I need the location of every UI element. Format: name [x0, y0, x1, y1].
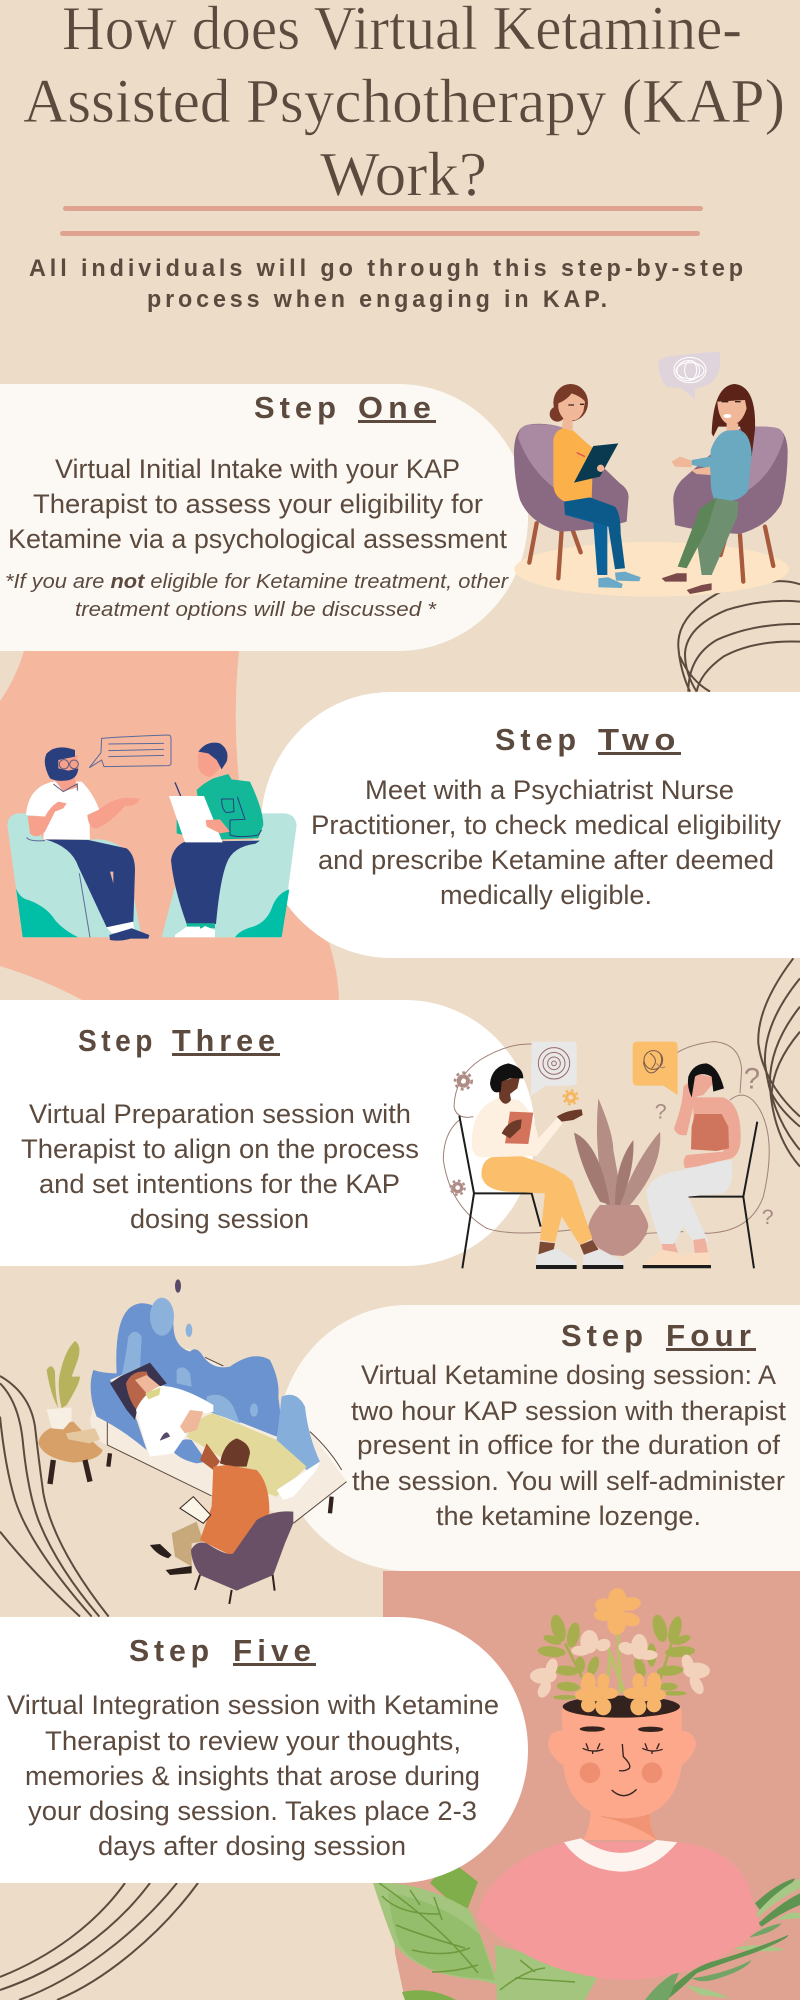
illustration: step one therapist and client	[514, 352, 789, 597]
question marks: ?	[655, 1100, 667, 1124]
heading: step one: Step	[254, 390, 341, 425]
text: step one body: Ketamine via a psychological assessment	[8, 524, 508, 554]
heading: step four: Four	[666, 1318, 756, 1353]
text: step four body	[351, 1360, 787, 1531]
text: step three body: dosing session	[130, 1204, 309, 1234]
title: Assisted Psychotherapy (KAP)	[23, 68, 785, 136]
subtitle: All individuals will go through this step-by-step	[29, 255, 747, 282]
heading: step two: Two	[598, 722, 681, 757]
text: step four body: two hour KAP session with therapist	[351, 1396, 787, 1426]
title	[23, 0, 785, 209]
panel: step one	[0, 384, 528, 651]
heading: step five: Five	[233, 1633, 316, 1668]
heading: step one	[254, 390, 436, 425]
heading: step five: Step	[129, 1633, 214, 1668]
text: step five body: memories & insights that arose during	[25, 1761, 480, 1791]
illustration: big leaves behind step five	[373, 1860, 600, 2000]
text: step two body: and prescribe Ketamine after deemed	[318, 845, 774, 875]
flowers and leaves	[530, 1588, 710, 1715]
text: step four body: the ketamine lozenge.	[436, 1501, 701, 1531]
gears	[451, 1073, 578, 1195]
heading: step four	[561, 1318, 756, 1353]
text: step three body: and set intentions for the KAP	[39, 1169, 400, 1199]
heading: step one: One	[358, 390, 436, 425]
text: step five body: days after dosing session	[98, 1831, 406, 1861]
heading: step three: Step	[78, 1023, 157, 1058]
heading: step four: Step	[561, 1318, 648, 1353]
text: step two body: medically eligible.	[440, 880, 652, 910]
panel: step four	[278, 1305, 800, 1571]
text: step four body: the session. You will self-administer	[352, 1466, 785, 1496]
decorative curves near step three	[758, 958, 800, 1167]
question marks: ?	[762, 1205, 774, 1229]
text: eligibility note	[5, 570, 509, 621]
text: eligibility note: *If you are not eligible for Ketamine treatment, other	[5, 570, 509, 593]
question marks: ?	[744, 1062, 760, 1095]
decorative curves near step one	[678, 581, 800, 692]
text: eligibility note: treatment options will be discussed *	[75, 598, 437, 621]
illustration: step five person with flowers growing from head	[477, 1588, 760, 1980]
title: Work?	[320, 141, 487, 209]
text: step three body: Virtual Preparation session with	[29, 1099, 411, 1129]
text: step two body: Meet with a Psychiatrist Nurse	[365, 775, 734, 805]
panel: step three	[0, 1000, 535, 1266]
subtitle	[29, 255, 747, 313]
text: step one body: Therapist to assess your eligibility for	[33, 489, 483, 519]
text: step two body	[311, 775, 782, 910]
text: step four body: present in office for the duration of	[357, 1430, 781, 1460]
text: step five body: Therapist to review your thoughts,	[45, 1726, 461, 1756]
speech bubble	[89, 735, 171, 768]
illustration: step four dosing session	[38, 1279, 347, 1604]
text: step three body	[21, 1099, 419, 1234]
illustration: step two two men talking	[7, 735, 297, 941]
subtitle: process when engaging in KAP.	[147, 286, 611, 313]
illustration: fern behind shirt	[645, 1878, 800, 2000]
panel: step two	[261, 692, 800, 958]
question marks	[655, 1062, 774, 1229]
heading: step three	[78, 1023, 280, 1058]
text: step five body: Virtual Integration session with Ketamine	[7, 1690, 499, 1720]
background shape: salmon blob	[0, 651, 339, 1000]
decorative curves near step four	[0, 1376, 109, 1617]
text: step one body	[8, 454, 508, 554]
background shape: rose blob	[383, 1571, 800, 2000]
panel: step five	[0, 1617, 528, 1883]
heading: step five	[129, 1633, 316, 1668]
decorative curves near step five	[0, 1883, 198, 2000]
text: step one body: Virtual Initial Intake with your KAP	[55, 454, 460, 484]
text: step five body	[7, 1690, 499, 1861]
heading: step two: Step	[495, 722, 581, 757]
text: step four body: Virtual Ketamine dosing session: A	[361, 1360, 776, 1390]
illustration: step three therapist and client with plant	[443, 1042, 774, 1269]
text: step two body: Practitioner, to check medical eligibility	[311, 810, 782, 840]
heading: step two	[495, 722, 681, 757]
heading: step three: Three	[172, 1023, 280, 1058]
text: step three body: Therapist to align on the process	[21, 1134, 419, 1164]
text: step five body: your dosing session. Takes place 2-3	[28, 1796, 477, 1826]
